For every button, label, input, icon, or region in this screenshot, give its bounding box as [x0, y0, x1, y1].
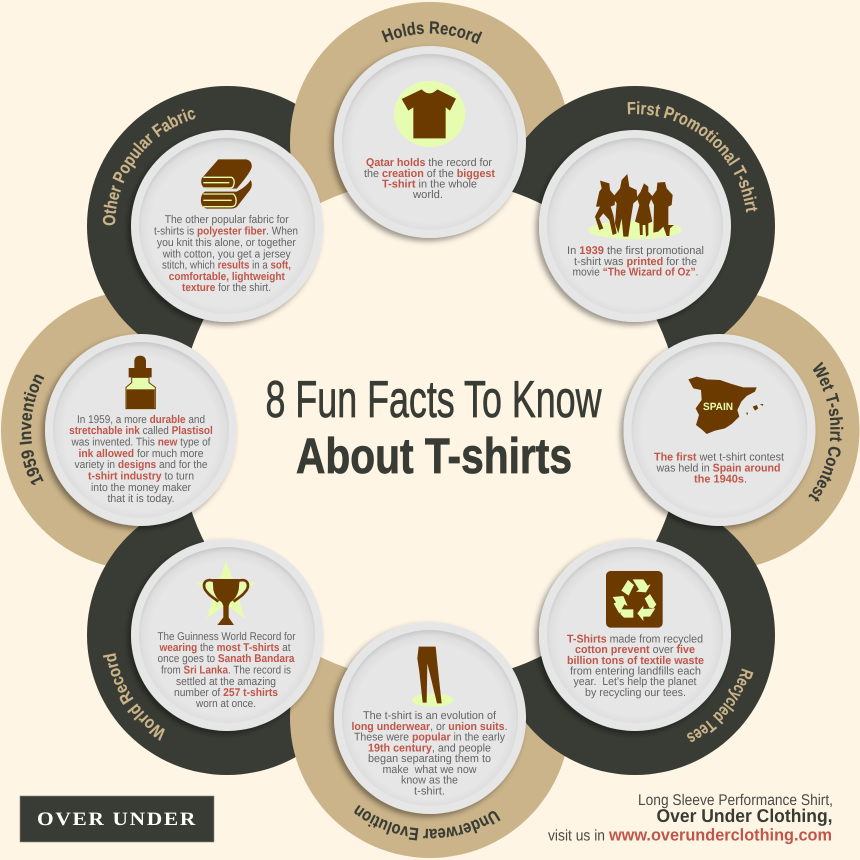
text block: t-shirt. [414, 786, 445, 798]
panel: wet t-shirt contest [616, 334, 844, 532]
central background circle [178, 178, 682, 682]
text block: 19th century, and people [368, 743, 491, 755]
text block: movie “The Wizard of Oz”. [572, 266, 698, 278]
text block: with cotton, you get a jersey [162, 249, 291, 261]
icon: ink bottle [126, 356, 155, 409]
text block [567, 245, 704, 278]
text block: t-shirt was printed for the [574, 256, 697, 268]
panel: underwear evolution [328, 621, 526, 840]
ring: first promotional t-shirt [495, 86, 775, 366]
text block: The Guinness World Record for [158, 631, 296, 643]
footer call to action: Over Under Clothing, [656, 805, 832, 826]
text block: was invented. This new type of [71, 437, 211, 449]
text block: In 1959, a more durable and [77, 414, 205, 426]
logo: over under: OVER UNDER [37, 809, 197, 830]
text block: settled at the amazing [176, 676, 276, 688]
circle badge [539, 130, 731, 322]
footer call to action: Long Sleeve Performance Shirt, [638, 792, 833, 809]
circle badge [131, 130, 323, 322]
text block: The t-shirt is an evolution of [363, 710, 497, 722]
text block: The other popular fabric for [165, 214, 289, 226]
heading: other popular fabric: Other Popular Fabric [102, 109, 196, 226]
text block [158, 631, 296, 710]
text block: know as the [401, 775, 458, 787]
text block [69, 414, 213, 505]
text block: worn at once. [195, 698, 256, 710]
panel: 1959 invention [20, 334, 238, 532]
text block: by recycling our tees. [585, 687, 686, 699]
text block: number of 257 t-shirts [174, 687, 278, 699]
text block: wearing the most T-shirts at [159, 642, 291, 654]
text block: The first wet t-shirt contest [654, 452, 785, 464]
text block: from Sri Lanka. The record is [161, 665, 291, 677]
ring: holds record [290, 2, 570, 282]
text block: into the money maker [91, 482, 191, 494]
text block: T-Shirts made from recycled [567, 634, 703, 646]
icon: trophy on star [196, 561, 256, 625]
icon: recycling symbol [606, 571, 663, 628]
panel: holds record [328, 21, 526, 245]
text block [351, 710, 508, 798]
text block: stretchable ink called Plastisol [69, 425, 213, 437]
icon: map of spain [688, 377, 763, 434]
text block: world. [412, 189, 443, 201]
text block: t-shirt industry to turn [88, 471, 194, 483]
icon: long underwear [412, 647, 453, 707]
circle badge [334, 622, 526, 814]
text block: the creation of the biggest [364, 168, 495, 180]
panel: world record [103, 538, 324, 741]
ring: other popular fabric [87, 86, 367, 366]
text block: from entering landfills each [570, 666, 701, 678]
icon: map of spain: SPAIN [703, 401, 733, 413]
text block [567, 634, 704, 699]
text block: In 1939 the first promotional [567, 245, 704, 257]
circle badge [131, 539, 323, 731]
icon: wizard of oz silhouette [588, 174, 682, 239]
text block: Qatar holds the record for [366, 157, 492, 169]
ring: world record [87, 495, 367, 775]
text block: T-shirt in the whole [382, 179, 477, 191]
title: About T-shirts [296, 428, 572, 484]
heading: recycled tees: Recycled Tees [687, 668, 754, 742]
icon: folded fabric [201, 159, 252, 209]
panel: other popular fabric [102, 109, 324, 329]
heading: 1959 invention: 1959 Invention [20, 374, 44, 486]
icon: t-shirt [394, 81, 465, 147]
text block [654, 452, 785, 486]
heading: underwear evolution: Underwear Evolution [354, 804, 500, 840]
title: 8 Fun Facts To Know [266, 371, 602, 429]
circle badge [624, 334, 816, 526]
heading: first promotional t-shirt: First Promotional T-shirt [628, 101, 758, 212]
text block: These were popular in the early [354, 732, 505, 744]
ring: underwear evolution [290, 578, 570, 858]
title [266, 371, 602, 484]
footer call to action [548, 792, 833, 845]
text block [364, 157, 495, 201]
text block: variety in designs and for the [74, 459, 208, 471]
logo: over under [20, 796, 214, 842]
circle badge [539, 539, 731, 731]
heading: holds record: Holds Record [382, 21, 482, 44]
text block [154, 214, 298, 294]
text block: the 1940s. [694, 474, 747, 486]
text block: that it is today. [108, 493, 174, 505]
circle badge [334, 46, 526, 238]
text block: year. Let’s help the planet [574, 676, 697, 688]
footer call to action: visit us in [548, 828, 605, 845]
text block: billion tons of textile waste [567, 655, 704, 667]
text block: texture for the shirt. [182, 282, 271, 294]
footer call to action: www.overunderclothing.com [608, 826, 832, 845]
ring: recycled tees [495, 495, 775, 775]
heading: world record: World Record [103, 653, 165, 741]
text block: ink allowed for much more [78, 448, 204, 460]
panel: first promotional t-shirt [532, 101, 758, 329]
text block: cotton prevent over five [575, 644, 695, 656]
text block: make what we now [382, 764, 477, 776]
ring: 1959 invention [1, 290, 281, 570]
text block: long underwear, or union suits. [351, 721, 508, 733]
heading: wet t-shirt contest: Wet T-shirt Contest [808, 362, 844, 502]
ring: wet t-shirt contest [580, 290, 860, 570]
panel: recycled tees [532, 538, 754, 742]
text block: once goes to Sanath Bandara [158, 653, 295, 665]
text block: comfortable, lightweight [169, 271, 285, 283]
text block: you knit this alone, or together [157, 237, 296, 249]
text block: t-shirts is polyester fiber. When [154, 226, 298, 238]
text block: stitch, which results in a soft, [162, 260, 291, 272]
circle badge [45, 334, 237, 526]
text block: began separating them to [368, 753, 491, 765]
text block: was held in Spain around [656, 463, 781, 475]
